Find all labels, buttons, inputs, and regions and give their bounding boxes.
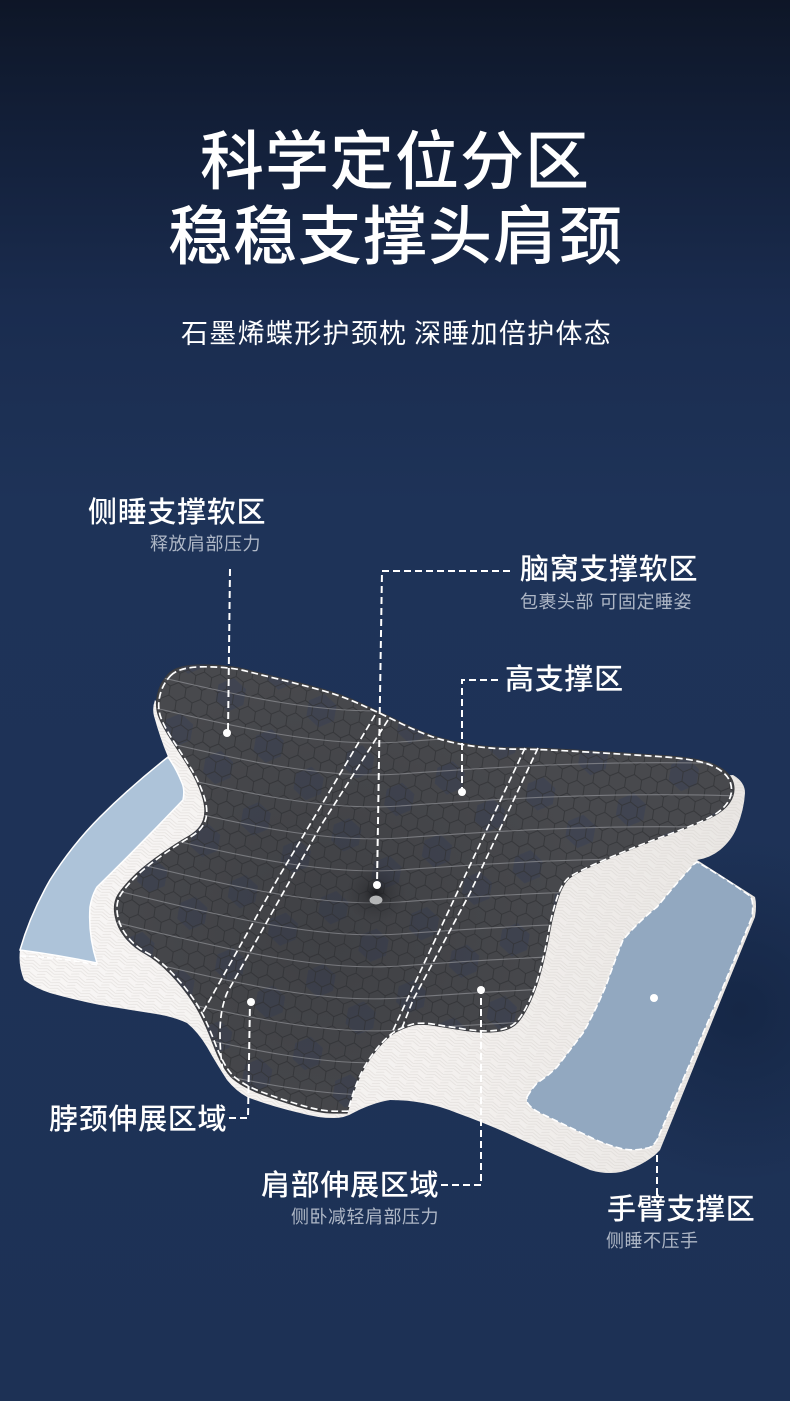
callout: high support zone: 高支撑区 xyxy=(505,663,624,696)
callout: occipital soft zone xyxy=(373,553,698,889)
callout: shoulder extension zone xyxy=(261,986,485,1227)
callout: shoulder extension zone: 侧卧减轻肩部压力 xyxy=(291,1207,439,1227)
callout: shoulder extension zone: 肩部伸展区域 xyxy=(261,1169,439,1202)
callout: occipital soft zone: 包裹头部 可固定睡姿 xyxy=(520,592,692,612)
title: 稳稳支撑头肩颈 xyxy=(168,201,623,273)
head hollow button xyxy=(370,896,382,904)
dark fabric top xyxy=(114,664,735,1114)
callout: neck extension zone: 脖颈伸展区域 xyxy=(49,1103,227,1136)
callout: side sleep soft zone xyxy=(88,496,266,737)
callout: arm support zone: 侧睡不压手 xyxy=(606,1231,698,1251)
subtitle: 石墨烯蝶形护颈枕 xyxy=(181,319,407,349)
stitched edge xyxy=(117,667,732,1111)
right arm panel xyxy=(527,862,753,1150)
foam body xyxy=(20,700,756,1173)
title xyxy=(168,126,623,273)
callout: high support zone xyxy=(458,663,624,796)
callout: arm support zone: 手臂支撑区 xyxy=(607,1193,756,1226)
left arm panel xyxy=(20,757,184,965)
callout: side sleep soft zone: 释放肩部压力 xyxy=(150,534,261,554)
callout: occipital soft zone: 脑窝支撑软区 xyxy=(520,553,698,586)
left seam lines xyxy=(203,715,388,1070)
right seam lines xyxy=(390,748,538,1037)
callout: arm support zone xyxy=(606,994,756,1251)
callout: side sleep soft zone: 侧睡支撑软区 xyxy=(88,496,266,529)
callout: neck extension zone xyxy=(49,998,255,1136)
pillow illustration xyxy=(20,650,756,1173)
subtitle: 深睡加倍护体态 xyxy=(414,319,612,349)
title: 科学定位分区 xyxy=(200,126,590,198)
